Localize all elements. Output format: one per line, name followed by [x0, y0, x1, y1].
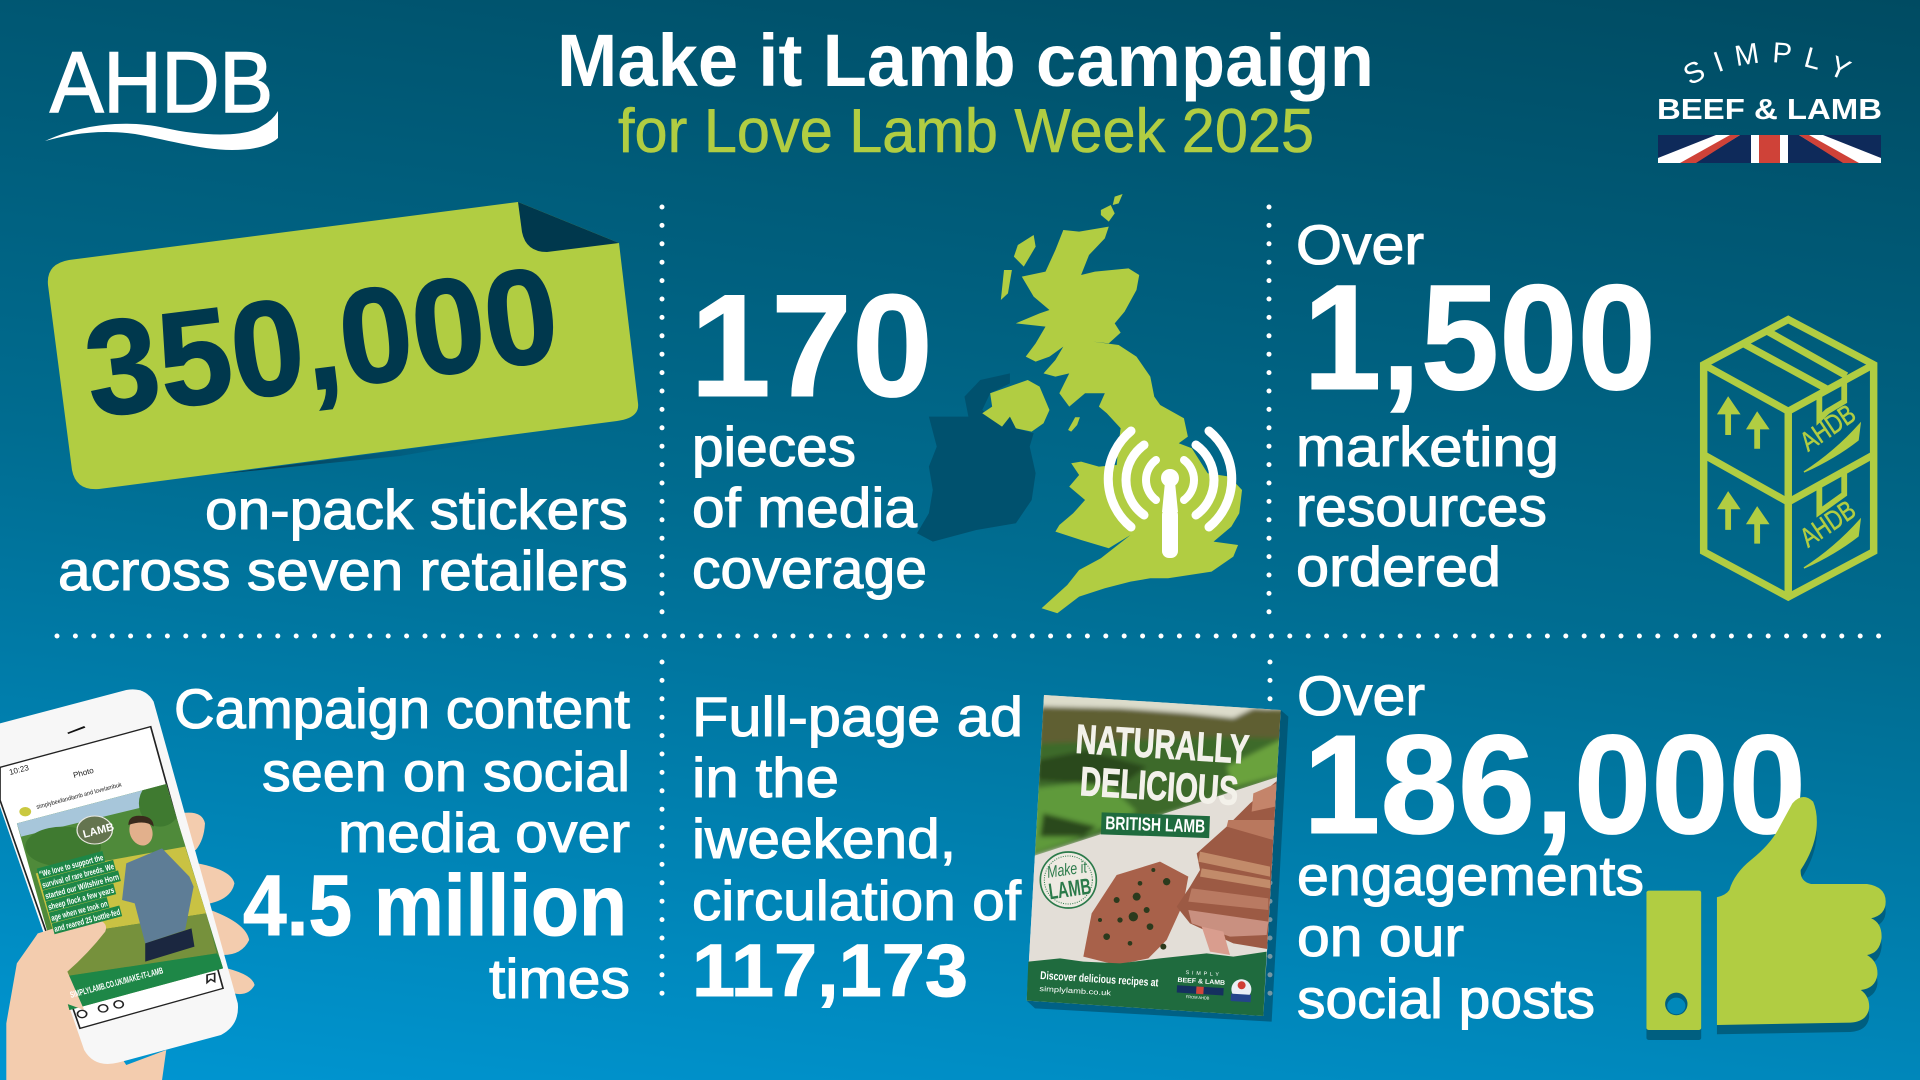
- caption: [692, 415, 927, 600]
- ad sub-head: BRITISH LAMB: [1105, 812, 1206, 837]
- sticker shadow: [220, 432, 540, 474]
- panel: media coverage: [690, 194, 1242, 613]
- panel: on-pack stickers: [48, 202, 638, 602]
- caption: iweekend,: [692, 807, 956, 870]
- caption: social posts: [1297, 967, 1595, 1030]
- caption: marketing: [1296, 415, 1559, 478]
- phone post quote: and reared 25 bottle-fed: [53, 907, 121, 934]
- ad footer: simplylamb.co.uk: [1039, 984, 1112, 997]
- icon: boxes: [1704, 319, 1874, 597]
- phone post quote: age when we took on: [50, 898, 109, 923]
- caption: resources: [1296, 475, 1547, 538]
- icon: boxes: AHDB: [1795, 495, 1861, 553]
- ad logos: SIMPLY: [1185, 970, 1220, 978]
- number: 4.5 million: 4.5 million: [243, 858, 627, 954]
- caption: on our: [1297, 905, 1464, 968]
- phone post quote: survival of rare breeds. We: [41, 861, 115, 890]
- icon: radio signal: [1108, 431, 1232, 558]
- caption: ordered: [1296, 535, 1501, 598]
- ad footer: [1039, 970, 1159, 1000]
- panel: social engagements: [1297, 664, 1886, 1040]
- phone post quote: sheep flock a few years: [47, 885, 115, 912]
- caption: circulation of: [692, 869, 1021, 932]
- caption: [1297, 844, 1644, 1030]
- phone url: SIMPLYLAMB.CO.UK/MAKE-IT-LAMB: [69, 965, 165, 1000]
- label: Over: Over: [1296, 213, 1424, 276]
- caption: pieces: [692, 415, 856, 478]
- number: 170: 170: [690, 264, 933, 427]
- caption: [692, 685, 1023, 932]
- ad logos: FROM AHDB: [1186, 994, 1210, 1001]
- phone text: simplybeefandlamb and lovelambuk: [36, 781, 123, 811]
- dotted dividers: [57, 207, 1885, 1010]
- caption: times: times: [489, 947, 630, 1010]
- logo: Simply Beef & Lamb: BEEF & LAMB: [1657, 94, 1882, 126]
- phone text: Photo: [72, 766, 95, 780]
- caption: seen on social: [262, 740, 630, 803]
- icon: thumbs up: [1646, 797, 1886, 1040]
- caption: Campaign content: [174, 677, 630, 740]
- caption: coverage: [692, 537, 927, 600]
- image: hand holding phone: [0, 689, 255, 1080]
- icon: boxes: AHDB: [1795, 399, 1861, 457]
- logo: AHDB: AHDB: [50, 35, 273, 131]
- phone badge: LAMB: [82, 821, 116, 841]
- ad logos: [1176, 970, 1252, 1003]
- ad headline: [1074, 716, 1250, 814]
- phone text: 10:23: [8, 763, 30, 777]
- number: 350,000: 350,000: [77, 238, 566, 446]
- caption: of media: [692, 476, 918, 539]
- panel: marketing resources: [1296, 213, 1874, 598]
- caption: [1296, 415, 1559, 598]
- ad badge: LAMB: [1047, 873, 1093, 904]
- caption: Full-page ad: [692, 685, 1023, 748]
- image: magazine ad: [1023, 690, 1288, 1022]
- sticker: [48, 202, 638, 489]
- phone text: [8, 763, 123, 811]
- phone post quote: [37, 851, 122, 934]
- sticker fold: [518, 202, 619, 252]
- number: 117,173: 117,173: [692, 929, 968, 1012]
- caption: across seven retailers: [58, 539, 628, 602]
- ad footer: Discover delicious recipes at: [1040, 970, 1159, 989]
- logo: Simply Beef & Lamb: SIMPLY: [1684, 42, 1852, 83]
- title: [557, 19, 1374, 166]
- number: 186,000: 186,000: [1303, 705, 1806, 863]
- caption: [58, 478, 628, 602]
- ad headline: NATURALLY: [1074, 716, 1250, 773]
- phone post quote: started our Wiltshire Horn: [44, 872, 120, 901]
- caption: in the: [692, 746, 839, 809]
- caption: media over: [338, 801, 630, 864]
- ad logos: BEEF & LAMB: [1177, 977, 1225, 987]
- ad headline: DELICIOUS: [1079, 758, 1240, 814]
- icon: UK map: [917, 194, 1242, 613]
- label: Over: Over: [1297, 664, 1425, 727]
- title: for Love Lamb Week 2025: [618, 97, 1314, 166]
- ad badge: [1045, 857, 1093, 904]
- logo: Simply Beef & Lamb: [1657, 42, 1882, 163]
- caption: on-pack stickers: [205, 478, 628, 541]
- title: Make it Lamb campaign: [557, 19, 1374, 102]
- panel: social media reach: [0, 677, 630, 1080]
- phone post quote: “We love to support the: [38, 852, 104, 879]
- panel: full-page ad: [692, 685, 1288, 1022]
- number: 1,500: 1,500: [1303, 253, 1656, 421]
- ad badge: Make it: [1046, 857, 1089, 882]
- caption: engagements: [1297, 844, 1644, 907]
- caption: [174, 677, 630, 864]
